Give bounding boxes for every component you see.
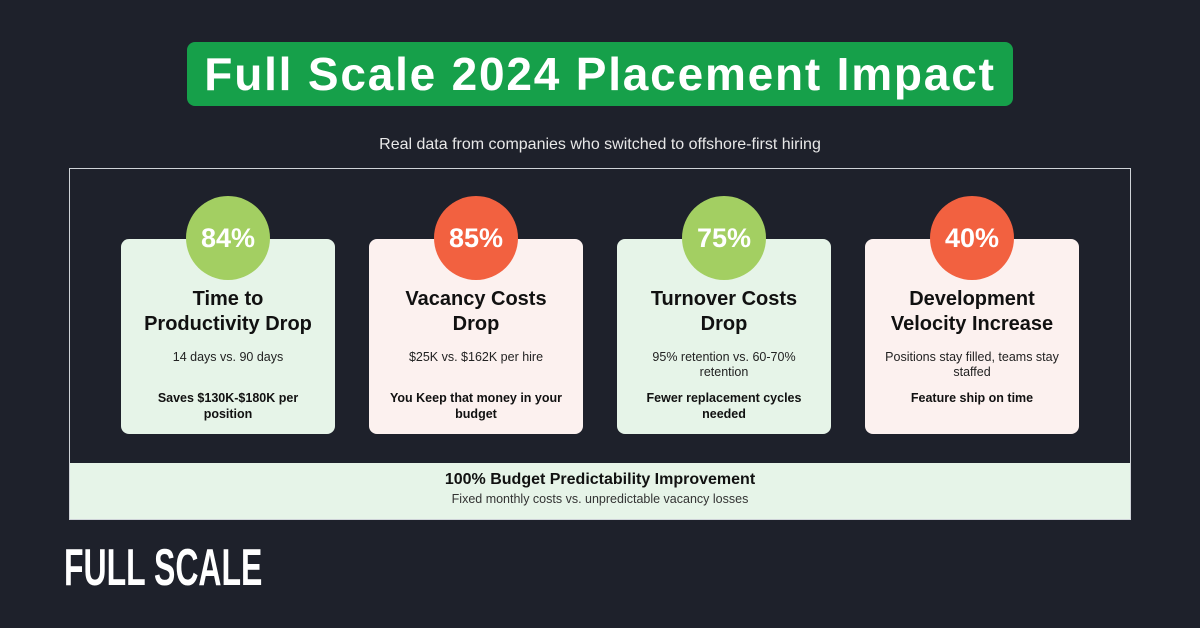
- footer band: 100% Budget Predictability Improvement: [445, 471, 755, 488]
- card: time to productivity: Time to: [193, 288, 263, 310]
- subtitle: Real data from companies who switched to offshore-first hiring: [379, 136, 821, 153]
- card: turnover costs: Fewer replacement cycles needed: [647, 391, 801, 421]
- text: 85%: [449, 223, 503, 253]
- text: 75%: [697, 223, 751, 253]
- card: time to productivity: 14 days vs. 90 days: [173, 350, 283, 364]
- card: development velocity: Feature ship on time: [911, 391, 1033, 405]
- card: time to productivity: Saves $130K-$180K per position: [158, 391, 298, 421]
- card: vacancy costs: Vacancy Costs: [405, 288, 547, 310]
- card: development velocity: Positions stay filled, teams stay staffed: [885, 350, 1059, 379]
- panel: stats frame: [69, 168, 1131, 520]
- card: time to productivity: [121, 239, 335, 434]
- card: turnover costs: Turnover Costs: [651, 288, 797, 310]
- card: turnover costs: Drop: [701, 313, 747, 335]
- card: time to productivity: Productivity Drop: [144, 313, 312, 335]
- card: vacancy costs: [369, 239, 583, 434]
- footer band: Fixed monthly costs vs. unpredictable vacancy losses: [452, 492, 748, 506]
- title: Full Scale 2024 Placement Impact: [204, 48, 996, 100]
- footer band: [70, 463, 1130, 519]
- card: development velocity: Velocity Increase: [891, 313, 1053, 335]
- card: vacancy costs: $25K vs. $162K per hire: [409, 350, 543, 364]
- card: vacancy costs: You Keep that money in your budget: [390, 391, 562, 421]
- card: development velocity: [865, 239, 1079, 434]
- card: development velocity: Development: [909, 288, 1035, 310]
- card: vacancy costs: Drop: [453, 313, 499, 335]
- logo: FULL SCALE: [64, 539, 262, 597]
- text: 84%: [201, 223, 255, 253]
- card: turnover costs: [617, 239, 831, 434]
- text: 40%: [945, 223, 999, 253]
- card: turnover costs: 95% retention vs. 60-70% retention: [652, 350, 796, 379]
